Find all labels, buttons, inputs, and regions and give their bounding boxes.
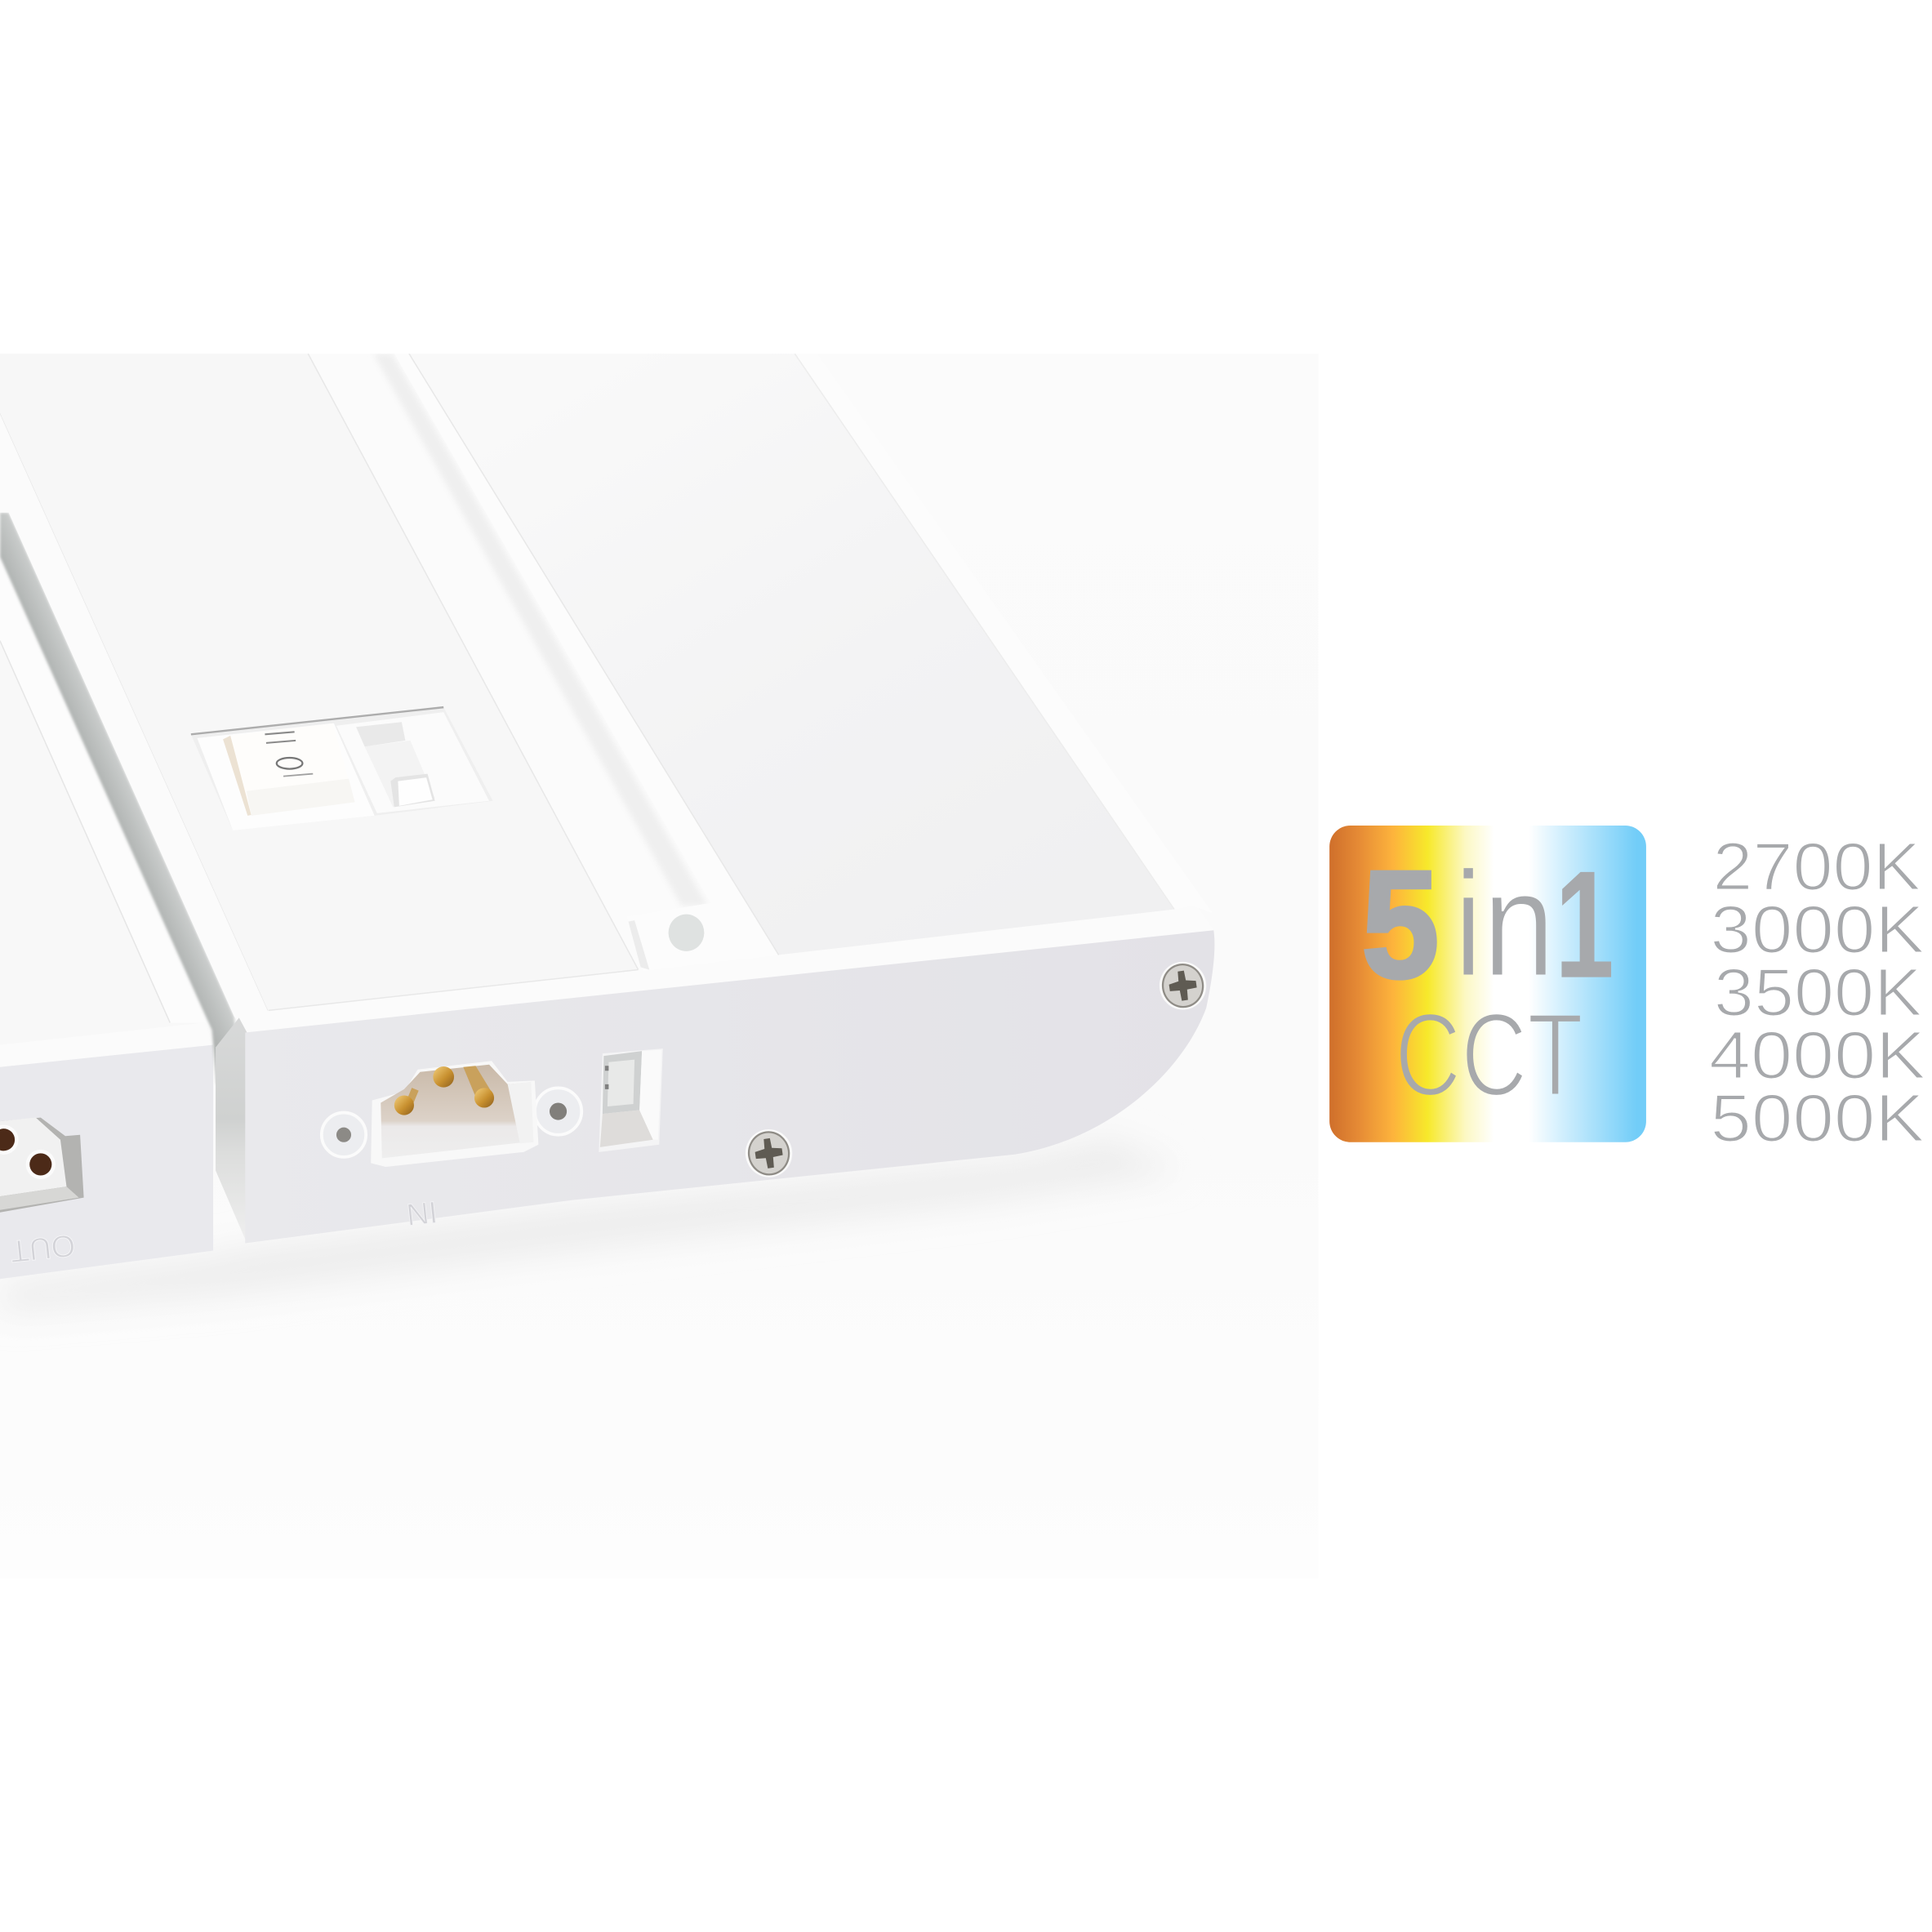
left light bar <box>0 640 213 1279</box>
right light bar <box>0 354 1214 1244</box>
infographic canvas <box>0 354 1923 1318</box>
controller cover plate <box>0 413 269 1011</box>
low-voltage side port <box>599 1048 663 1152</box>
left bar front bevel <box>0 1022 213 1067</box>
side face <box>216 1017 247 1242</box>
embossed OUT label: OUT <box>9 1228 77 1269</box>
rail groove <box>373 354 707 906</box>
socket interior <box>381 1065 525 1158</box>
badge gradient tile <box>1329 826 1646 1142</box>
screw: front bottom <box>742 1126 795 1180</box>
slider switch <box>336 712 489 813</box>
embossed IN label: IN <box>405 1195 439 1232</box>
screw: front right <box>1156 959 1209 1013</box>
power switch <box>191 707 493 830</box>
channel between bars <box>0 513 239 1084</box>
contact shadows on surface <box>16 1147 1135 1307</box>
5000K: 5000K <box>1710 1080 1925 1155</box>
lip of bar <box>0 511 235 1018</box>
rocker symbols <box>265 732 313 777</box>
input connector <box>322 1061 581 1167</box>
badge word CCT: CCT <box>1395 988 1583 1120</box>
3500K: 3500K <box>1714 954 1922 1030</box>
badge: 5 in 1 CCT <box>1329 826 1646 1142</box>
socket surround <box>371 1061 538 1167</box>
outer rim <box>795 354 1213 913</box>
mounting ears <box>322 1113 366 1157</box>
4000K: 4000K <box>1709 1017 1925 1093</box>
rocker base <box>197 723 375 830</box>
gold pins <box>394 1066 494 1115</box>
panel: product photo <box>0 354 1215 1318</box>
output socket <box>0 1118 84 1213</box>
3000K: 3000K <box>1710 891 1925 967</box>
rail ridge <box>394 354 779 959</box>
left bar front face <box>0 1045 213 1279</box>
2700K: 2700K <box>1712 828 1921 904</box>
badge numeral 1: 1 <box>1555 839 1614 1010</box>
badge word in: in <box>1454 840 1555 1008</box>
colour temperature list <box>1709 828 1925 1155</box>
front face <box>245 930 1214 1244</box>
badge numeral 5: 5 <box>1361 839 1439 1010</box>
mounting block with hole <box>627 902 744 971</box>
diffuser lens <box>409 354 1174 955</box>
top bevel of front face <box>238 906 1213 1032</box>
rocker button <box>230 723 355 816</box>
